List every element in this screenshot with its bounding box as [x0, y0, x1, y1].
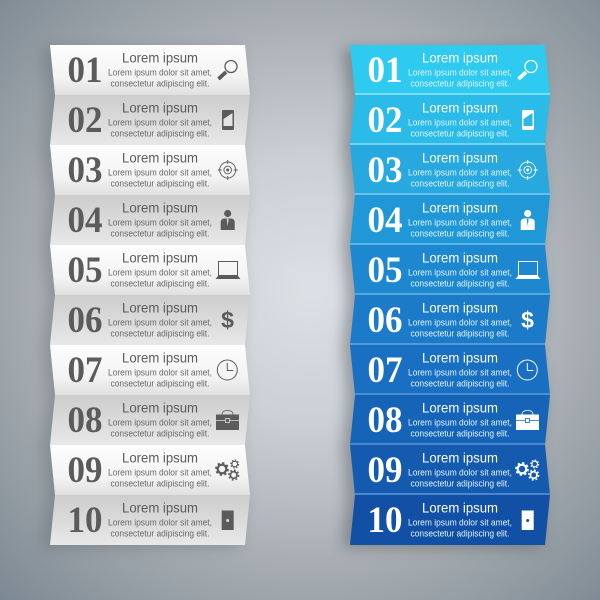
step 02 blue: 02: [368, 100, 402, 141]
step 06 grey: Lorem ipsum dolor sit amet,: [108, 318, 212, 328]
step 01 grey: Lorem ipsum: [122, 50, 198, 66]
icon: magnifier: [518, 60, 537, 79]
step 08 grey: 08: [68, 400, 102, 441]
step 04 blue: Lorem ipsum: [422, 200, 498, 216]
step 06 grey: consectetur adipiscing elit.: [110, 328, 210, 340]
icon: briefcase: [216, 410, 239, 430]
icon: briefcase: [516, 410, 539, 430]
icon: laptop: [216, 262, 240, 279]
step 08 grey: consectetur adipiscing elit.: [110, 428, 210, 440]
step 02 grey: Lorem ipsum dolor sit amet,: [108, 118, 212, 128]
step 10 grey: Lorem ipsum: [122, 500, 198, 516]
step 07 blue: 07: [368, 350, 402, 391]
step 03 blue: 03: [368, 150, 402, 191]
step 03 blue: Lorem ipsum: [422, 150, 498, 166]
step 01 blue: 01: [368, 50, 402, 91]
step 04 grey: Lorem ipsum: [122, 200, 198, 216]
step 02 blue: [350, 95, 550, 146]
step 05 blue: Lorem ipsum: [422, 250, 498, 266]
step 06 blue: consectetur adipiscing elit.: [410, 328, 510, 340]
step 01 blue: consectetur adipiscing elit.: [410, 78, 510, 90]
step 02 blue: Lorem ipsum: [422, 100, 498, 116]
icon: gears: [516, 460, 539, 480]
step 04 blue: [350, 195, 550, 246]
shadow: blue panel: [342, 48, 545, 548]
step 06 grey: Lorem ipsum: [122, 300, 198, 316]
step 07 grey: consectetur adipiscing elit.: [110, 378, 210, 390]
panel: grey list: [50, 45, 250, 545]
step 04 blue: Lorem ipsum dolor sit amet,: [408, 218, 512, 228]
step 09 grey: consectetur adipiscing elit.: [110, 478, 210, 490]
step 06 blue: Lorem ipsum dolor sit amet,: [408, 318, 512, 328]
icon: magnifier: [218, 60, 237, 79]
step 06 blue: 06: [368, 300, 402, 341]
step 10 blue: Lorem ipsum dolor sit amet,: [408, 518, 512, 528]
icon: dollar: $: [521, 307, 534, 333]
step 01 blue: [350, 45, 550, 96]
step 03 grey: [50, 145, 250, 195]
step 10 grey: 10: [68, 500, 102, 541]
icon: phone: [222, 110, 234, 130]
step 05 grey: 05: [68, 250, 102, 291]
step 01 blue: Lorem ipsum dolor sit amet,: [408, 68, 512, 78]
step 07 blue: [350, 345, 550, 396]
icon: phone: [522, 110, 534, 130]
step 10 grey: consectetur adipiscing elit.: [110, 528, 210, 540]
step 01 grey: 01: [68, 50, 102, 91]
step 02 grey: consectetur adipiscing elit.: [110, 128, 210, 140]
step 07 blue: Lorem ipsum: [422, 350, 498, 366]
step 01 grey: Lorem ipsum dolor sit amet,: [108, 68, 212, 78]
step 07 blue: consectetur adipiscing elit.: [410, 378, 510, 390]
step 08 grey: Lorem ipsum: [122, 400, 198, 416]
icon: device: [522, 510, 534, 530]
step 02 grey: 02: [68, 100, 102, 141]
step 04 grey: consectetur adipiscing elit.: [110, 228, 210, 240]
step 01 grey: [50, 45, 250, 95]
step 03 grey: 03: [68, 150, 102, 191]
step 09 grey: [50, 445, 250, 495]
step 08 blue: Lorem ipsum dolor sit amet,: [408, 418, 512, 428]
step 09 blue: Lorem ipsum dolor sit amet,: [408, 468, 512, 478]
step 07 grey: Lorem ipsum: [122, 350, 198, 366]
step 08 blue: Lorem ipsum: [422, 400, 498, 416]
step 07 grey: 07: [68, 350, 102, 391]
step 03 grey: Lorem ipsum dolor sit amet,: [108, 168, 212, 178]
icon: device: [222, 510, 234, 530]
step 04 grey: [50, 195, 250, 245]
step 08 blue: 08: [368, 400, 402, 441]
step 06 blue: Lorem ipsum: [422, 300, 498, 316]
shadow: grey panel: [42, 48, 245, 548]
icon: person: [521, 210, 535, 230]
step 09 grey: Lorem ipsum: [122, 450, 198, 466]
icon: clock: [217, 360, 237, 380]
step 10 grey: Lorem ipsum dolor sit amet,: [108, 518, 212, 528]
icon: person: [221, 210, 235, 230]
step 05 blue: consectetur adipiscing elit.: [410, 278, 510, 290]
step 05 blue: [350, 245, 550, 296]
step 10 blue: consectetur adipiscing elit.: [410, 528, 510, 540]
step 10 grey: [50, 495, 250, 545]
step 08 grey: [50, 395, 250, 445]
step 08 blue: [350, 395, 550, 446]
step 03 blue: Lorem ipsum dolor sit amet,: [408, 168, 512, 178]
step 05 grey: Lorem ipsum: [122, 250, 198, 266]
panel: blue list: [350, 45, 550, 545]
step 07 blue: Lorem ipsum dolor sit amet,: [408, 368, 512, 378]
step 02 blue: consectetur adipiscing elit.: [410, 128, 510, 140]
step 01 grey: consectetur adipiscing elit.: [110, 78, 210, 90]
step 09 grey: 09: [68, 450, 102, 491]
step 10 blue: 10: [368, 500, 402, 541]
step 05 grey: [50, 245, 250, 295]
step 10 blue: Lorem ipsum: [422, 500, 498, 516]
step 09 blue: 09: [368, 450, 402, 491]
step 02 blue: Lorem ipsum dolor sit amet,: [408, 118, 512, 128]
step 04 blue: consectetur adipiscing elit.: [410, 228, 510, 240]
step 05 grey: consectetur adipiscing elit.: [110, 278, 210, 290]
step 09 blue: [350, 445, 550, 496]
icon: clock: [517, 360, 537, 380]
step 09 grey: Lorem ipsum dolor sit amet,: [108, 468, 212, 478]
step 05 blue: Lorem ipsum dolor sit amet,: [408, 268, 512, 278]
icon: laptop: [516, 262, 540, 279]
icon: gears: [216, 460, 239, 480]
step 08 blue: consectetur adipiscing elit.: [410, 428, 510, 440]
step 04 blue: 04: [368, 200, 402, 241]
step 07 grey: Lorem ipsum dolor sit amet,: [108, 368, 212, 378]
step 10 blue: [350, 495, 550, 545]
step 02 grey: Lorem ipsum: [122, 100, 198, 116]
icon: target: [518, 160, 538, 180]
step 04 grey: Lorem ipsum dolor sit amet,: [108, 218, 212, 228]
step 06 grey: 06: [68, 300, 102, 341]
step 03 blue: [350, 145, 550, 196]
step 03 blue: consectetur adipiscing elit.: [410, 178, 510, 190]
step 01 blue: Lorem ipsum: [422, 50, 498, 66]
step 06 grey: [50, 295, 250, 345]
step 04 grey: 04: [68, 200, 102, 241]
icon: target: [218, 160, 238, 180]
step 05 grey: Lorem ipsum dolor sit amet,: [108, 268, 212, 278]
step 07 grey: [50, 345, 250, 395]
step 03 grey: Lorem ipsum: [122, 150, 198, 166]
step 06 blue: [350, 295, 550, 346]
step 03 grey: consectetur adipiscing elit.: [110, 178, 210, 190]
step 02 grey: [50, 95, 250, 145]
step 09 blue: Lorem ipsum: [422, 450, 498, 466]
step 05 blue: 05: [368, 250, 402, 291]
step 09 blue: consectetur adipiscing elit.: [410, 478, 510, 490]
icon: dollar: $: [221, 307, 234, 333]
step 08 grey: Lorem ipsum dolor sit amet,: [108, 418, 212, 428]
